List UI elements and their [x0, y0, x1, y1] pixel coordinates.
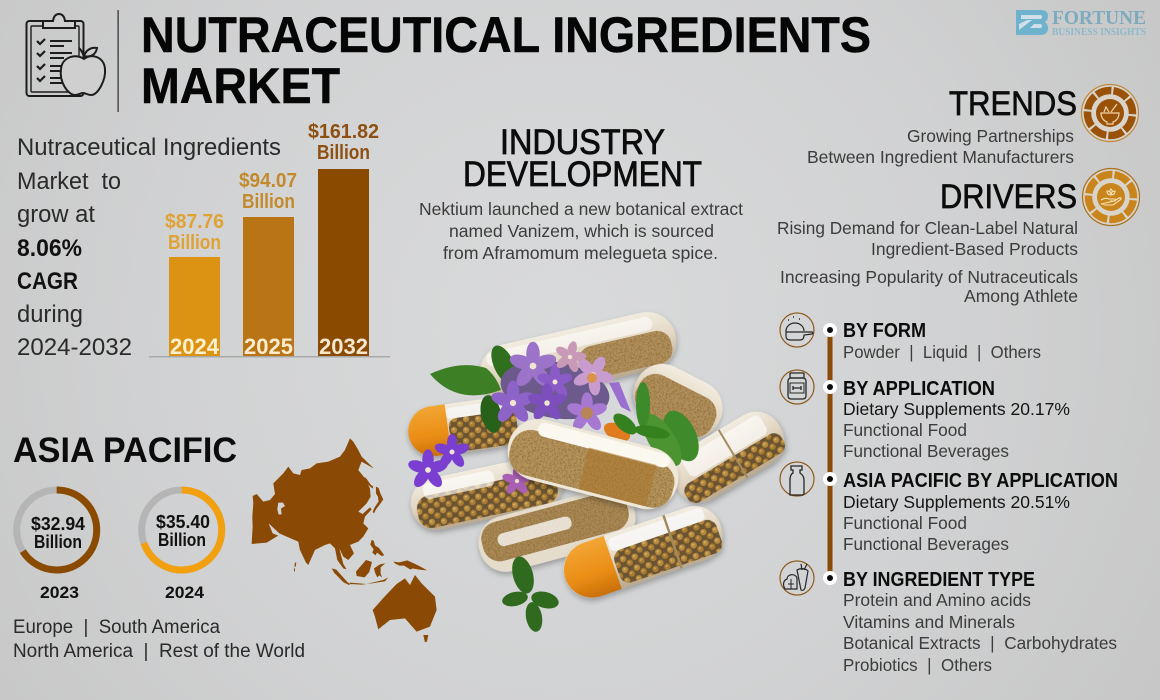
- donut: 2023: 2023: [40, 583, 79, 602]
- icon: trends badge: [1082, 84, 1138, 142]
- bar chart: market size: [149, 121, 390, 359]
- text: other regions: North America | Rest of the World: [13, 641, 305, 662]
- text: market growth summary: grow at: [17, 201, 95, 228]
- heading: drivers: DRIVERS: [940, 178, 1077, 216]
- icon: drivers badge: [1082, 168, 1140, 226]
- capsule: back right: [624, 354, 732, 448]
- segment: by application: Functional Beverages: [843, 441, 1009, 461]
- text: industry development body: Nektium launched a new botanical extract: [419, 199, 743, 219]
- segment: by form: [843, 320, 1041, 362]
- donut: 2024: Billion: [158, 530, 206, 550]
- segment: asia pacific by application: [843, 470, 1118, 554]
- text: drivers body: Ingredient-Based Products: [871, 239, 1078, 259]
- bar 2032: [308, 121, 379, 359]
- donut: 2024: $35.40: [156, 512, 210, 532]
- text: market growth summary: [17, 134, 281, 361]
- segment: asia pacific by application: Functional Food: [843, 513, 967, 533]
- text: other regions: [13, 617, 305, 662]
- icon: powder scoop: [780, 313, 814, 347]
- heading: industry development: INDUSTRY: [500, 123, 665, 162]
- leaves: behind main capsule: [430, 342, 706, 472]
- donut: 2024: [142, 490, 222, 602]
- capsule: main centre: [501, 412, 685, 516]
- text: trends body: Growing Partnerships: [907, 126, 1074, 146]
- capsule: lower right orange: [556, 499, 730, 605]
- icon: supplement jar: [780, 370, 814, 404]
- bar 2032: 2032: [319, 334, 368, 359]
- title: [141, 7, 871, 114]
- flowers: purple blossoms: [407, 337, 631, 496]
- segment: by form: BY FORM: [843, 320, 926, 342]
- bar 2024: $87.76: [165, 211, 224, 233]
- text: market growth summary: Market to: [17, 168, 121, 195]
- text: other regions: Europe | South America: [13, 617, 220, 638]
- text: drivers body: Increasing Popularity of Nutraceuticals: [780, 267, 1078, 287]
- text: market growth summary: Nutraceutical Ingredients: [17, 134, 281, 161]
- segment: by ingredient type: [843, 569, 1117, 675]
- segment: by application: Dietary Supplements 20.17%: [843, 399, 1070, 419]
- divider: [118, 10, 119, 112]
- text: market growth summary: during: [17, 301, 83, 328]
- donut: 2023: [17, 490, 97, 602]
- heading: industry development: [463, 123, 702, 194]
- text: market growth summary: 8.06%: [17, 235, 82, 262]
- bar 2025: 2025: [244, 334, 293, 359]
- donut: 2024: 2024: [165, 583, 205, 602]
- leaves: bottom sprig: [501, 554, 561, 633]
- bar 2025: Billion: [242, 191, 295, 213]
- bar 2032: $161.82: [308, 121, 379, 143]
- segment: asia pacific by application: Dietary Supplements 20.51%: [843, 492, 1070, 512]
- capsule: left orange: [405, 395, 520, 459]
- segment: asia pacific by application: ASIA PACIFIC BY APPLICATION: [843, 470, 1118, 492]
- text: drivers body: [777, 218, 1078, 306]
- segment: by application: BY APPLICATION: [843, 378, 995, 400]
- icon: vegetables: [780, 561, 814, 595]
- segment: by application: Functional Food: [843, 420, 967, 440]
- icon: bottle: [780, 462, 814, 496]
- illustration: herbal capsules: [405, 306, 794, 633]
- map: asia pacific: [252, 438, 437, 642]
- logo: Fortune Business Insights: [1016, 7, 1146, 38]
- segment: by application: [843, 378, 1070, 461]
- segment: asia pacific by application: Functional Beverages: [843, 534, 1009, 554]
- logo: Fortune Business Insights: BUSINESS INSIGHTS: [1052, 27, 1146, 38]
- text: industry development body: from Aframomum melegueta spice.: [443, 243, 718, 263]
- donut: 2023: Billion: [34, 532, 82, 552]
- heading: asia pacific: ASIA PACIFIC: [13, 431, 237, 470]
- capsule: left clear: [406, 452, 568, 534]
- text: drivers body: Among Athlete: [964, 286, 1078, 306]
- text: industry development body: [419, 199, 743, 263]
- segment: by ingredient type: Protein and Amino acids: [843, 590, 1031, 610]
- bar 2024: [165, 211, 224, 359]
- bar 2024: Billion: [168, 232, 221, 254]
- timeline spine: [823, 323, 837, 585]
- icon: clipboard and apple: [26, 14, 105, 96]
- capsule: lower centre: [472, 482, 642, 578]
- heading: trends: TRENDS: [949, 85, 1077, 123]
- logo: Fortune Business Insights: FORTUNE: [1052, 7, 1146, 29]
- capsule: right clear: [662, 402, 794, 512]
- donut: 2023: $32.94: [31, 514, 85, 534]
- bar 2032: Billion: [317, 142, 370, 164]
- capsule: back top: [474, 306, 682, 408]
- segment: by ingredient type: Vitamins and Minerals: [843, 612, 1015, 632]
- text: trends body: [807, 126, 1074, 167]
- text: drivers body: Rising Demand for Clean-Label Natural: [777, 218, 1078, 238]
- heading: industry development: DEVELOPMENT: [463, 155, 702, 194]
- text: market growth summary: 2024-2032: [17, 334, 132, 361]
- title: MARKET: [141, 58, 340, 114]
- segment: by ingredient type: BY INGREDIENT TYPE: [843, 569, 1035, 591]
- segment: by ingredient type: Botanical Extracts | Carbohydrates: [843, 633, 1117, 653]
- segment: by ingredient type: Probiotics | Others: [843, 655, 992, 675]
- text: industry development body: named Vanizem, which is sourced: [449, 221, 714, 241]
- bar 2025: [239, 170, 297, 359]
- text: trends body: Between Ingredient Manufacturers: [807, 147, 1074, 167]
- text: market growth summary: CAGR: [17, 268, 78, 295]
- segment: by form: Powder | Liquid | Others: [843, 342, 1041, 362]
- title: NUTRACEUTICAL INGREDIENTS: [141, 7, 871, 63]
- bar 2025: $94.07: [239, 170, 297, 192]
- bar 2024: 2024: [170, 334, 220, 359]
